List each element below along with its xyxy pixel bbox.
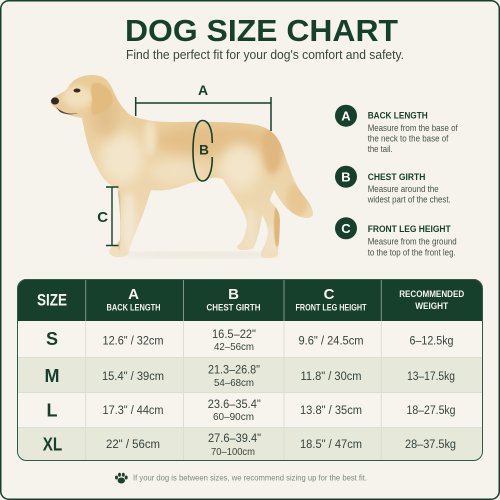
front leg height values: 13.8" / 35cm	[300, 405, 362, 417]
weight values: 6–12.5kg	[410, 336, 454, 348]
weight values: 18–27.5kg	[406, 405, 456, 417]
legend: back length	[335, 105, 458, 154]
table header: RECOMMENDED	[399, 289, 465, 299]
chest girth values: 70–100cm	[211, 446, 255, 458]
dog illustration	[50, 75, 313, 258]
dog ear	[91, 83, 113, 115]
legend: front leg height: C	[341, 221, 351, 236]
weight values: 13–17.5kg	[407, 371, 455, 383]
chest girth values: 21.3–26.8"	[208, 364, 260, 376]
back length values: 15.4" / 39cm	[102, 371, 164, 383]
chest girth values: 42–56cm	[214, 341, 254, 353]
measurement B: B	[199, 142, 209, 158]
legend: front leg height: to the top of the front leg.	[368, 247, 456, 257]
table header: FRONT LEG HEIGHT	[296, 303, 367, 313]
legend: front leg height: Measure from the ground	[368, 237, 457, 247]
chest girth values: 60–90cm	[213, 411, 254, 423]
footnote: If your dog is between sizes, we recommend sizing up for the best fit.	[133, 473, 367, 483]
table header	[37, 286, 465, 313]
legend: back length: A	[341, 108, 351, 124]
table header: SIZE	[37, 292, 67, 310]
legend: back length: the tail.	[368, 144, 393, 154]
measurement C	[97, 187, 118, 246]
legend: chest girth: CHEST GIRTH	[368, 172, 426, 183]
chest girth values: 27.6–39.4"	[208, 433, 261, 445]
front leg height values: 9.6" / 24.5cm	[298, 336, 364, 348]
weight values: 28–37.5kg	[405, 439, 456, 451]
size table	[18, 279, 482, 460]
back length values	[102, 336, 164, 451]
legend: back length: BACK LENGTH	[368, 110, 428, 121]
back length values: 22" / 56cm	[106, 439, 160, 451]
table header: CHEST GIRTH	[206, 303, 260, 313]
dog nose	[51, 97, 59, 105]
chest girth values: 23.6–35.4"	[208, 399, 261, 411]
legend: front leg height: FRONT LEG HEIGHT	[368, 224, 451, 235]
size labels: S	[46, 329, 58, 349]
table header: BACK LENGTH	[106, 303, 160, 313]
table header: WEIGHT	[415, 301, 449, 311]
title: DOG SIZE CHART	[125, 13, 398, 48]
chest girth values: 16.5–22"	[212, 329, 256, 341]
front leg height values: 18.5" / 47cm	[300, 439, 362, 451]
front leg height values	[298, 336, 364, 451]
measurement A	[136, 82, 271, 131]
table header: C	[324, 286, 335, 303]
dog eye	[74, 88, 80, 92]
measurement A: A	[198, 82, 208, 98]
back length values: 17.3" / 44cm	[102, 405, 164, 417]
chest girth values: 54–68cm	[214, 377, 254, 389]
subtitle: Find the perfect fit for your dog's comfort and safety.	[126, 48, 404, 62]
legend: chest girth: B	[341, 170, 351, 184]
chest girth values	[208, 329, 261, 458]
legend: chest girth: widest part of the chest.	[367, 195, 451, 205]
measurement B	[193, 120, 212, 181]
front leg height values: 11.8" / 30cm	[300, 371, 362, 383]
dog mouth	[56, 107, 78, 114]
legend: back length: the neck to the base of	[368, 134, 449, 144]
legend: chest girth: Measure around the	[368, 184, 439, 194]
size labels: XL	[43, 435, 62, 455]
legend: chest girth	[335, 166, 451, 205]
table header: B	[228, 286, 239, 303]
size labels: L	[46, 401, 58, 421]
icon: paw	[115, 473, 128, 484]
back length values: 12.6" / 32cm	[102, 336, 164, 348]
size labels: M	[44, 366, 60, 386]
weight values	[405, 336, 456, 451]
measurement C: C	[97, 209, 108, 226]
legend: front leg height	[335, 217, 457, 257]
table header: A	[128, 286, 139, 303]
legend: back length: Measure from the base of	[368, 123, 458, 133]
size labels	[43, 329, 62, 455]
